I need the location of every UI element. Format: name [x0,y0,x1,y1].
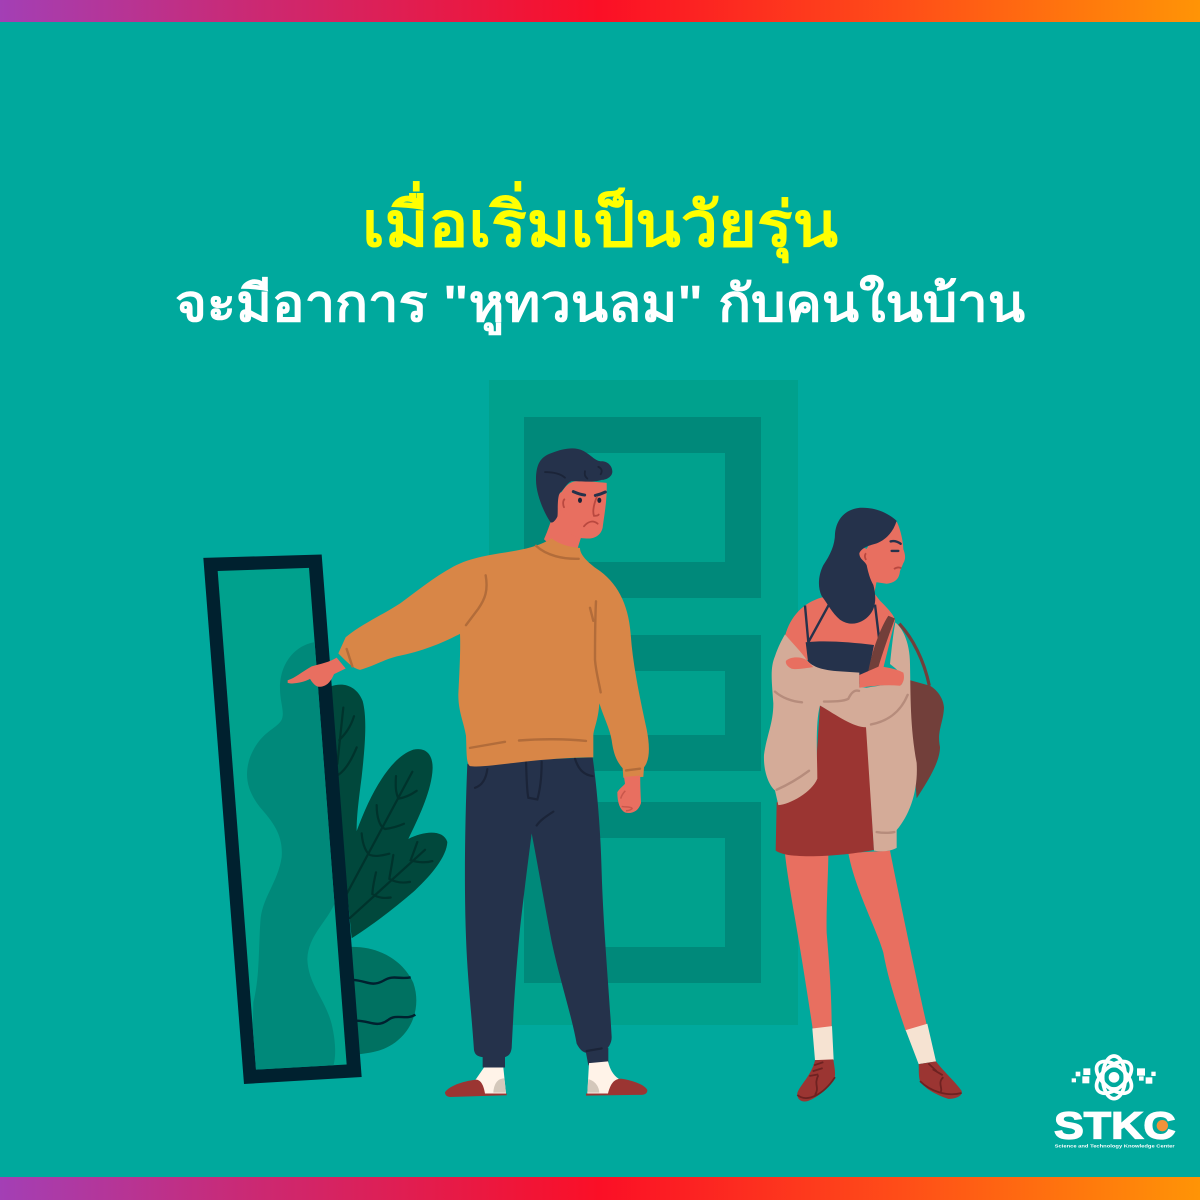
sweater [338,538,649,778]
logo emblem [1091,1055,1137,1099]
door [489,380,798,1025]
fist [617,776,641,813]
mirror [203,554,362,1084]
logo [1054,1055,1176,1148]
pointing hand [288,658,346,687]
arms [786,657,904,688]
logo tagline: Science and Technology Knowledge Center [1055,1143,1175,1148]
boots [797,1059,962,1101]
skirt [776,705,874,856]
socks [475,1061,619,1094]
bottom gradient bar [0,1177,1200,1200]
trousers [465,757,612,1057]
subheading: white line: จะมีอาการ "หูทวนลม" กับคนในบ้าน [175,274,1025,336]
bag [899,624,944,798]
hair [819,508,897,624]
top [806,641,874,711]
illustration: woman [764,508,962,1101]
title [175,181,1025,336]
socks [812,1024,936,1064]
neck and face [857,569,877,603]
logo orange dot [1157,1120,1168,1131]
logo wordmark: STKC [1054,1106,1176,1148]
cardigan [764,622,917,851]
bag strap [868,616,895,676]
shoes [445,1079,647,1097]
heading: yellow line: เมื่อเริ่มเป็นวัยรุ่น [362,181,838,263]
top gradient bar [0,0,1200,22]
neck [544,512,584,552]
hair [536,448,612,523]
facial details [573,492,605,495]
plant [330,685,447,1054]
man [288,448,649,1097]
torso [785,592,895,668]
illustration: plant, mirror and man [203,448,649,1097]
logo pixels [1072,1068,1156,1084]
face [555,481,607,539]
legs [785,851,927,1031]
